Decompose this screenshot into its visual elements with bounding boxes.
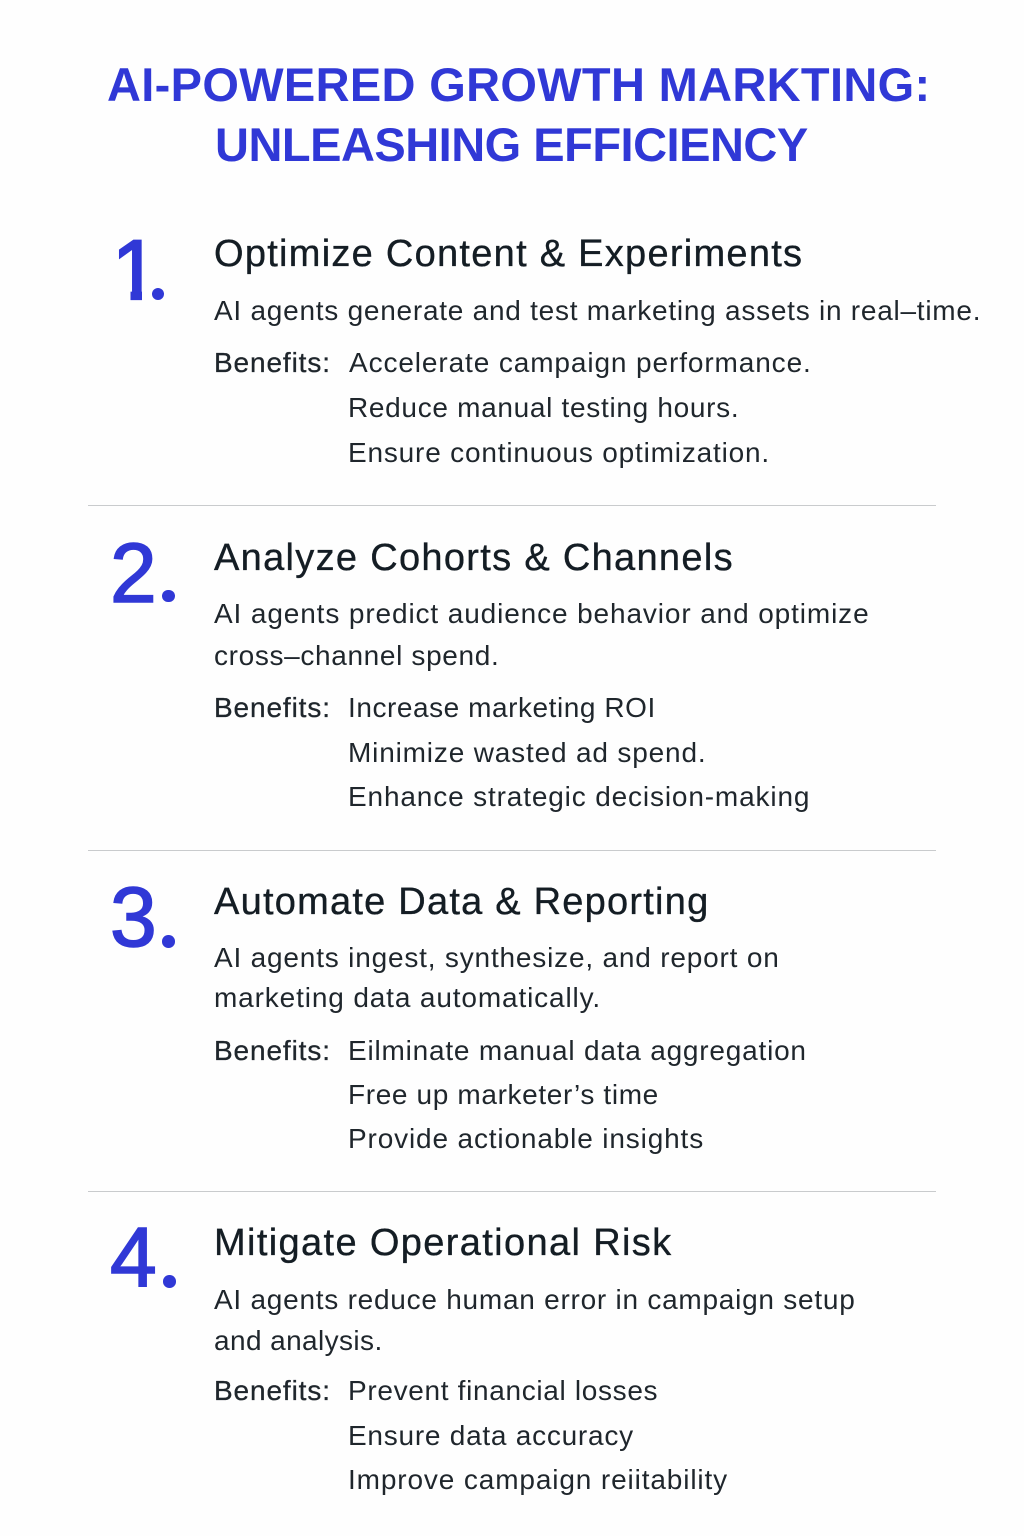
heading: step 3: Automate Data & Reporting <box>214 881 709 923</box>
heading: step 2: Analyze Cohorts & Channels <box>214 537 734 579</box>
benefits: step 2: Increase marketing ROI <box>348 692 656 723</box>
benefits: step 4 <box>214 1375 728 1495</box>
heading: step 4: Mitigate Operational Risk <box>214 1222 673 1264</box>
panel: step 3 <box>110 870 807 1154</box>
description: step 3: AI agents ingest, synthesize, and report on <box>214 942 780 973</box>
benefits: step 3: Eilminate manual data aggregation <box>348 1035 807 1066</box>
benefits: step 4: Ensure data accuracy <box>348 1420 634 1451</box>
number 4: 4 <box>110 1210 157 1304</box>
title: UNLEASHING EFFICIENCY <box>215 118 808 171</box>
benefits: step 3: Provide actionable insights <box>348 1123 704 1154</box>
number 1 <box>118 240 164 300</box>
benefits: step 1: Reduce manual testing hours. <box>348 392 739 423</box>
number 1: 1 <box>112 223 159 317</box>
description: step 4: and analysis. <box>214 1325 383 1356</box>
description: step 3 <box>214 942 780 1013</box>
description: step 2: AI agents predict audience behavior and optimize <box>214 598 870 629</box>
description: step 1: AI agents generate and test marketing assets in real–time. <box>214 295 981 326</box>
benefits: step 4: Improve campaign reiitability <box>348 1464 728 1495</box>
description: step 4 <box>214 1284 856 1356</box>
title <box>107 58 930 171</box>
number 3: 3 <box>110 870 157 964</box>
description: step 2: cross–channel spend. <box>214 640 499 671</box>
description: step 4: AI agents reduce human error in campaign setup <box>214 1284 856 1315</box>
benefits: step 3 <box>214 1035 807 1154</box>
benefits: step 2: Benefits: <box>214 692 331 723</box>
panel: step 2 <box>110 526 870 812</box>
title: AI-POWERED GROWTH MARKTING: <box>107 58 930 111</box>
number 2: 2 <box>110 526 157 620</box>
benefits: step 1: Ensure continuous optimization. <box>348 437 770 468</box>
heading: step 1: Optimize Content & Experiments <box>214 233 803 275</box>
description: step 2 <box>214 598 870 671</box>
benefits: step 2 <box>214 692 810 812</box>
description: step 3: marketing data automatically. <box>214 982 601 1013</box>
benefits: step 1: Benefits: <box>214 347 331 378</box>
panel: step 1 <box>118 233 981 468</box>
benefits: step 1: Accelerate campaign performance. <box>349 347 812 378</box>
benefits: step 3: Free up marketer’s time <box>348 1079 659 1110</box>
benefits: step 1 <box>214 347 812 468</box>
benefits: step 2: Enhance strategic decision-making <box>348 781 810 812</box>
benefits: step 2: Minimize wasted ad spend. <box>348 737 706 768</box>
benefits: step 3: Benefits: <box>214 1035 331 1066</box>
benefits: step 4: Prevent financial losses <box>348 1375 658 1406</box>
benefits: step 4: Benefits: <box>214 1375 331 1406</box>
